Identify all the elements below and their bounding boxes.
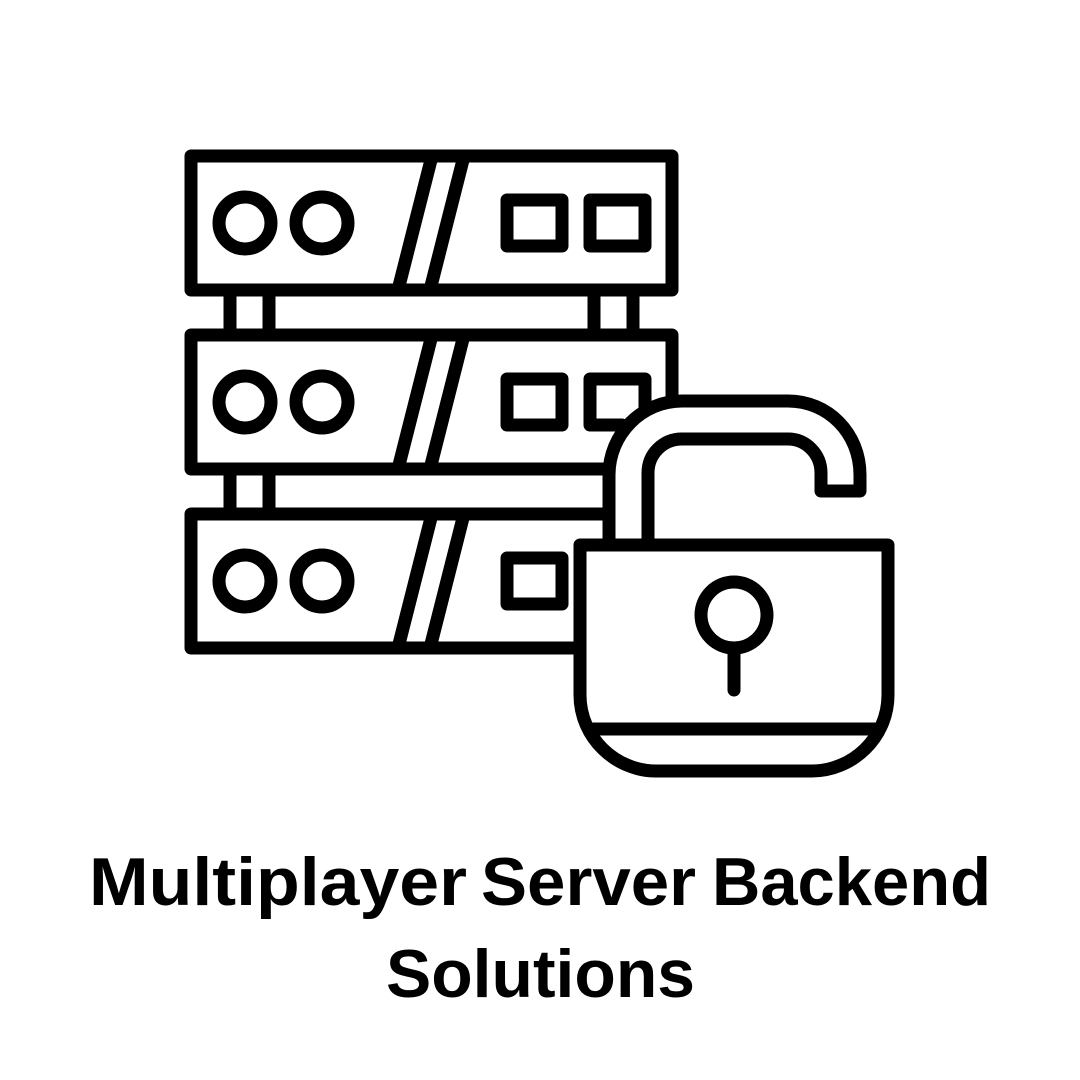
- keyhole: [701, 582, 767, 690]
- icon: server rack with open padlock: [191, 156, 888, 771]
- title: Multiplayer: [89, 844, 467, 920]
- title: Server: [481, 844, 696, 920]
- server unit: middle: [191, 335, 672, 469]
- connectors: top to middle: [230, 290, 633, 335]
- connectors: middle to bottom: [230, 469, 269, 514]
- server unit: top: [191, 156, 672, 290]
- title: Solutions: [386, 936, 695, 1012]
- server unit: bottom: [191, 514, 608, 648]
- padlock shackle: [609, 401, 860, 545]
- padlock body: [580, 545, 888, 771]
- title: Backend: [712, 844, 991, 920]
- title: [89, 844, 991, 1012]
